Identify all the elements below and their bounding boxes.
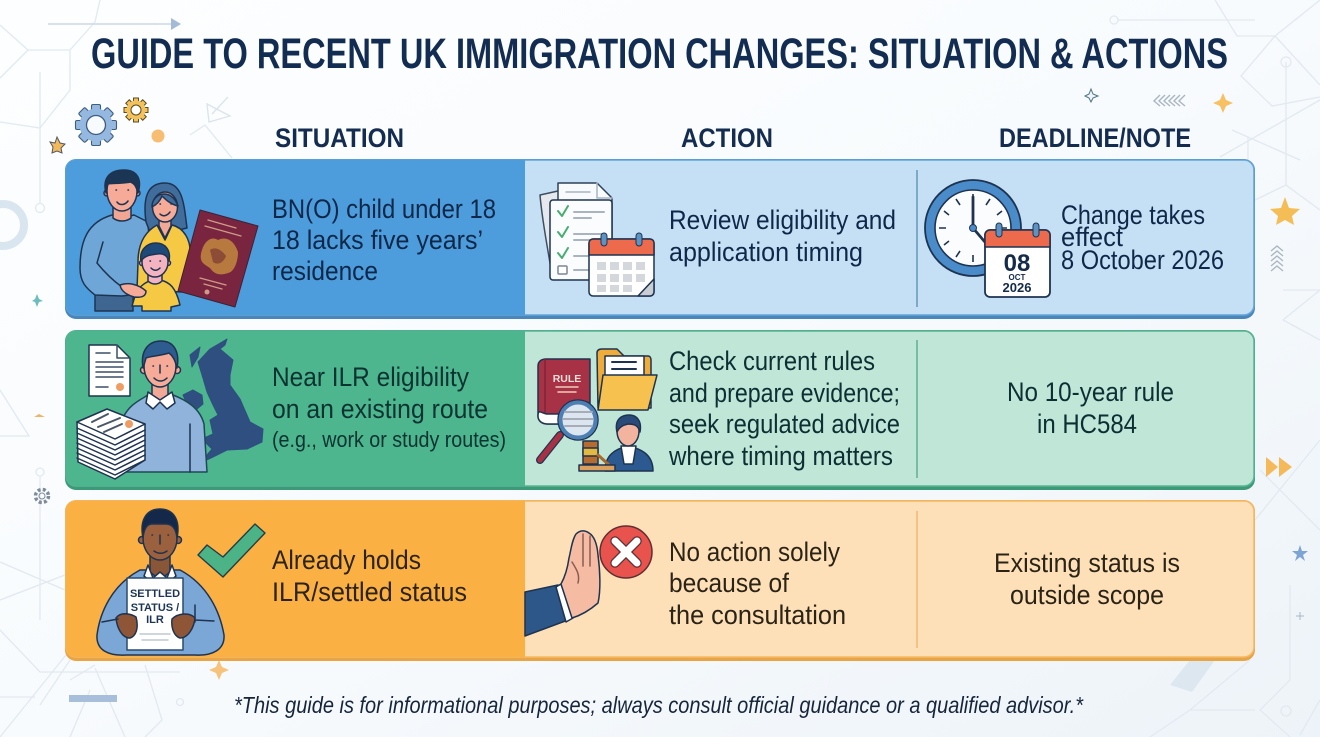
text: deadline 1: effect (1061, 222, 1123, 252)
text: situation 2 (272, 362, 506, 452)
icon: small orange mark (34, 414, 45, 417)
text: deadline 2: in HC584 (1037, 409, 1137, 439)
column heading: action: ACTION (681, 123, 773, 153)
icon: chevrons (1154, 95, 1185, 106)
icon: family with passport (80, 170, 258, 311)
icon: sparkle outline (1085, 89, 1098, 102)
footer note: *This guide is for informational purposes; always consult official guidance or a qualified advisor.* (234, 692, 1084, 718)
row 3 background (65, 500, 1255, 661)
column heading: situation: SITUATION (275, 123, 404, 153)
icon: clock with calendar 08 Oct 2026: OCT (1009, 273, 1026, 282)
icon: yellow gear (124, 98, 148, 122)
text: deadline 1: 8 October 2026 (1061, 245, 1224, 275)
icon: teal sparkle (32, 294, 43, 307)
text: deadline 3: Existing status is (994, 548, 1180, 578)
text: action 2 (668, 346, 900, 471)
icon: man holding settled status card: ILR (146, 614, 164, 626)
icon: gold star (1270, 197, 1300, 225)
icon: orange dot (152, 130, 164, 142)
icon: orange sparkle bottom (209, 660, 229, 680)
text: situation 1 (272, 194, 496, 286)
text: situation 1: BN(O) child under 18 (272, 194, 496, 224)
text: situation 1: residence (272, 256, 378, 286)
panel: row 2 near ILR (65, 330, 1255, 490)
text: deadline 3: outside scope (1010, 580, 1164, 610)
decorative triangle (207, 97, 230, 122)
icon: man holding settled status card: SETTLED (130, 588, 180, 600)
icon: clock with calendar 08 Oct 2026: 2026 (1003, 280, 1031, 295)
panel: row 1 BN(O) child (65, 159, 1255, 319)
text: deadline 1 (1061, 200, 1224, 275)
text: action 2: Check current rules (669, 346, 875, 376)
text: action 3 (669, 537, 846, 630)
icon: blue gear (76, 104, 116, 146)
icon: orange sparkle (1213, 93, 1233, 113)
decorative bar (69, 695, 117, 702)
text: action 2: and prepare evidence; (669, 378, 900, 408)
icon: grey gear (36, 490, 48, 502)
text: deadline 3 (994, 548, 1180, 610)
text: situation 3: ILR/settled status (272, 577, 467, 607)
text: situation 3 (272, 545, 467, 607)
text: action 3: the consultation (669, 600, 846, 630)
icon: rule book, folder, magnifier, barrister: RULE (553, 373, 581, 385)
text: deadline 2: No 10-year rule (1007, 377, 1174, 407)
icon: clock with calendar 08 Oct 2026: 08 (1004, 250, 1030, 277)
text: deadline 1: Change takes (1061, 200, 1205, 230)
icon: checklist with calendar (540, 183, 654, 296)
icon: man with documents and UK map (77, 339, 263, 479)
icon: man holding settled status card: STATUS / (131, 602, 179, 614)
text: action 3: because of (669, 568, 789, 598)
text: situation 3: Already holds (272, 545, 421, 575)
text: situation 2: (e.g., work or study routes) (272, 427, 506, 452)
icon: blue star (1292, 545, 1308, 561)
icon: rule book, folder, magnifier, barrister (538, 349, 657, 471)
icon: plus sparkle (1296, 612, 1304, 620)
text: action 2: seek regulated advice (669, 409, 900, 439)
column heading: deadline/note: DEADLINE/NOTE (999, 123, 1191, 153)
text: situation 1: 18 lacks five years’ (272, 225, 483, 255)
decorative arrow: top left (48, 18, 181, 30)
icon: orange double arrow (1266, 457, 1292, 477)
icon: green check mark (198, 524, 265, 577)
row 1 background (65, 159, 1255, 319)
icon: up chevrons (1271, 246, 1283, 271)
icon: man holding settled status card (97, 509, 224, 655)
text: action 1 (669, 205, 896, 267)
text: action 1: Review eligibility and (669, 205, 896, 235)
text: situation 2: on an existing route (272, 394, 488, 424)
text: action 2: where timing matters (668, 441, 893, 471)
text: action 1: application timing (669, 237, 863, 267)
icon: stop hand with red cross (525, 526, 652, 636)
panel: row 3 already holds ILR (65, 500, 1255, 661)
row 2 background (65, 330, 1255, 490)
text: situation 2: Near ILR eligibility (272, 362, 469, 392)
text: deadline 2 (1007, 377, 1174, 439)
icon: clock with calendar 08 Oct 2026 (925, 180, 1050, 297)
text: action 3: No action solely (669, 537, 840, 567)
icon: small star left (50, 137, 65, 153)
